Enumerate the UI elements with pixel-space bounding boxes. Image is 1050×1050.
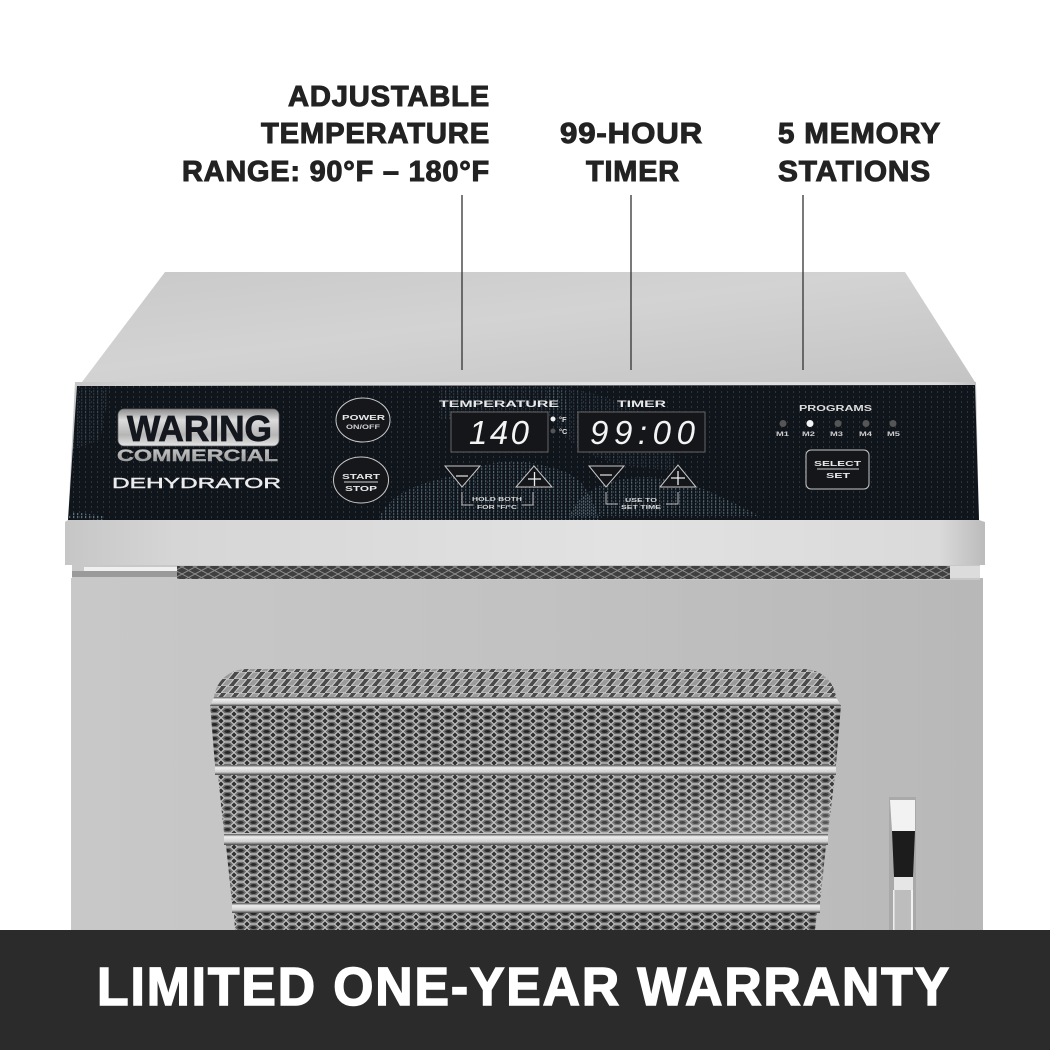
- button: power: ON/OFF: [346, 424, 380, 431]
- button: power: [336, 398, 390, 442]
- button: start/stop: STOP: [345, 484, 377, 493]
- timer hint: [621, 498, 662, 511]
- logo: Waring Commercial: [112, 408, 281, 492]
- logo: Waring Commercial: DEHYDRATOR: [112, 475, 281, 492]
- callout: 99-hour timer: TIMER: [586, 156, 680, 188]
- callout: adjustable temperature range: TEMPERATURE: [261, 118, 490, 150]
- timer hint: SET TIME: [621, 505, 662, 511]
- dehydrator lid: [82, 272, 975, 382]
- programs indicators: M1: [776, 432, 790, 438]
- programs indicators: M2: [802, 432, 816, 438]
- warranty banner: [0, 930, 1050, 1050]
- timer buttons: [589, 465, 696, 504]
- callout: 99-hour timer: 99-HOUR: [560, 118, 703, 150]
- programs indicators: M3: [830, 432, 844, 438]
- button: select/set: SET: [826, 471, 851, 480]
- door handle: [889, 797, 916, 930]
- temperature hint: [472, 497, 522, 511]
- temperature hint: FOR °F/°C: [477, 505, 517, 511]
- callout: adjustable temperature range: [182, 81, 490, 188]
- callout: 5 memory stations: 5 MEMORY: [778, 118, 941, 150]
- door window with mesh trays: [210, 669, 841, 930]
- programs indicators: [776, 404, 901, 438]
- button: power: POWER: [342, 413, 386, 422]
- warranty banner: LIMITED ONE-YEAR WARRANTY: [97, 957, 951, 1017]
- timer hint: USE TO: [625, 498, 658, 504]
- dehydrator body: [71, 578, 983, 930]
- vent strip: [72, 565, 980, 580]
- temperature hint: HOLD BOTH: [472, 497, 522, 503]
- programs indicators: PROGRAMS: [799, 404, 873, 413]
- timer display: TIMER: [617, 399, 666, 410]
- callout: adjustable temperature range: RANGE: 90°F – 180°F: [182, 156, 490, 188]
- button: select/set: SELECT: [814, 459, 862, 468]
- logo: Waring Commercial: WARING: [127, 408, 272, 449]
- timer display: 99:00: [590, 414, 696, 451]
- programs indicators: M4: [859, 432, 873, 438]
- button: start/stop: START: [342, 472, 381, 481]
- callout: 5 memory stations: [778, 118, 941, 188]
- control panel: [60, 380, 990, 525]
- callout: 99-hour timer: [560, 118, 703, 188]
- button: start/stop: [334, 457, 388, 503]
- leader lines: [462, 195, 803, 370]
- temperature buttons: [445, 466, 552, 505]
- callout: adjustable temperature range: ADJUSTABLE: [288, 81, 490, 113]
- temperature display: 140: [469, 414, 530, 451]
- temperature display: °C: [559, 427, 568, 436]
- temperature display: °F: [559, 415, 567, 424]
- button: select/set: [806, 450, 869, 489]
- temperature display: [439, 399, 568, 452]
- programs indicators: M5: [887, 432, 901, 438]
- timer display: [578, 399, 705, 452]
- callout: 5 memory stations: STATIONS: [778, 156, 931, 188]
- logo: Waring Commercial: COMMERCIAL: [117, 446, 278, 465]
- temperature display: TEMPERATURE: [439, 399, 559, 410]
- front band: [65, 382, 985, 565]
